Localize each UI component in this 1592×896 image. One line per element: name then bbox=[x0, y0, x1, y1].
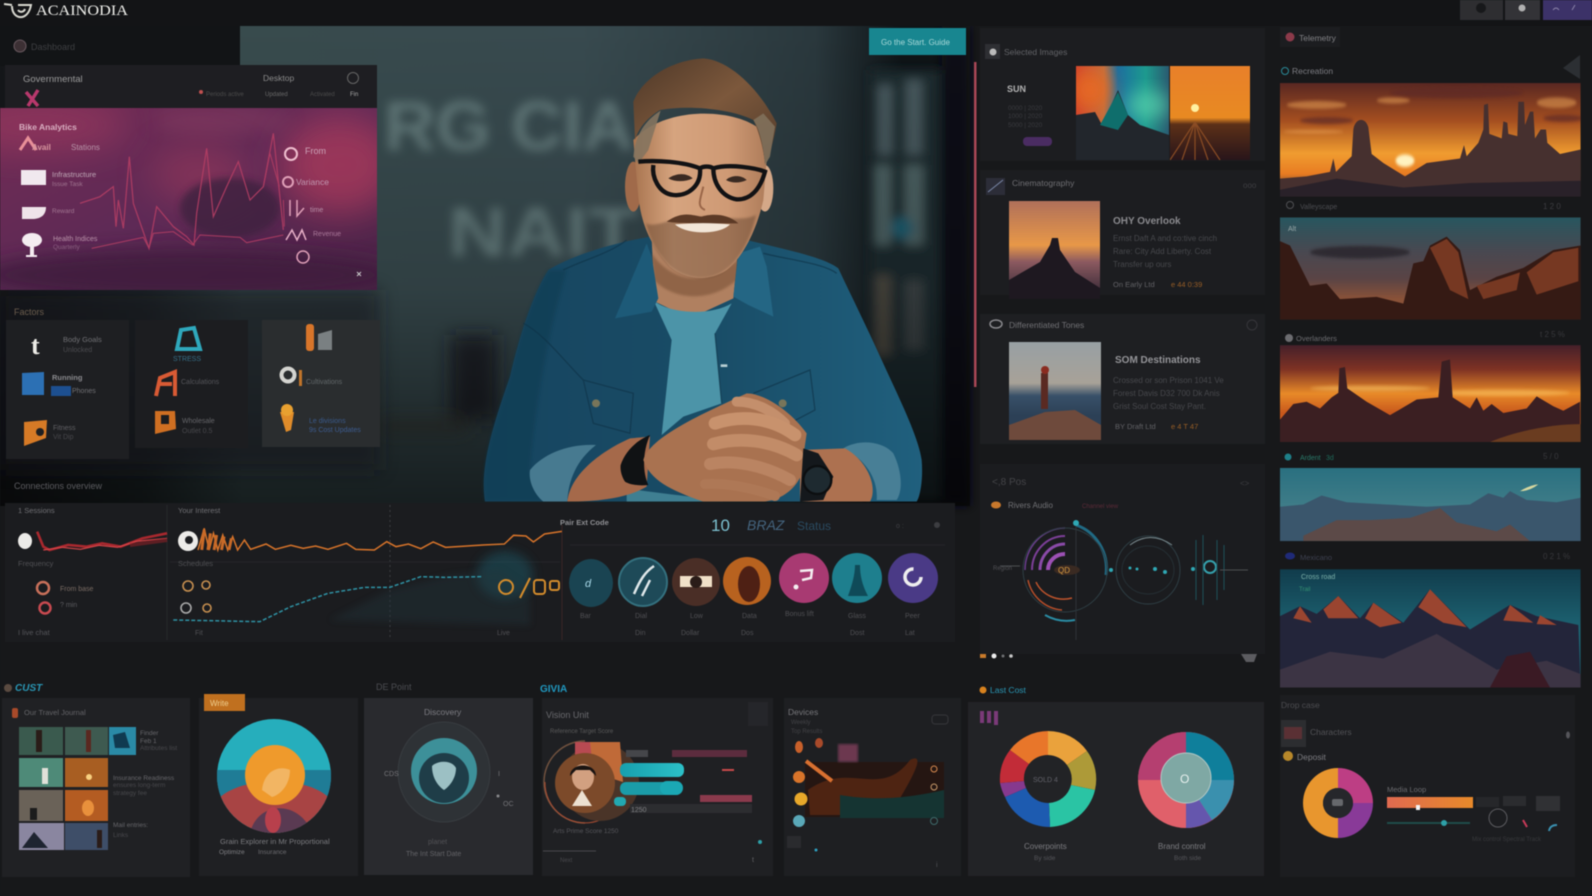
panel: dark activity list: Top Results bbox=[791, 729, 822, 735]
image: figure at sunset bbox=[1009, 201, 1100, 299]
progress control bbox=[1387, 785, 1473, 826]
panel: feature tile two bbox=[135, 320, 248, 448]
clasped hands bbox=[643, 393, 807, 502]
blurred wall lettering bbox=[384, 87, 638, 271]
panel title: Channel view bbox=[1082, 504, 1119, 510]
summary text: SUN bbox=[1007, 84, 1026, 94]
icon: orange box bbox=[155, 411, 176, 434]
thumbnail notes: strategy fee bbox=[113, 790, 147, 797]
small red ring nodes: ? min bbox=[60, 602, 77, 609]
panel: feature tile three bbox=[262, 320, 380, 447]
circle captions: Live bbox=[497, 630, 510, 637]
story text: Forest Davis D32 700 Dk Anis bbox=[1113, 389, 1220, 398]
panel: feature tile one: Running bbox=[52, 373, 83, 382]
panel: teal dial: Discovery bbox=[424, 707, 462, 717]
card background bbox=[0, 107, 378, 290]
panel: radial signal chart: Region bbox=[993, 566, 1012, 572]
collars bbox=[615, 243, 658, 318]
story text: Ernst Daft A and co:tive cinch bbox=[1113, 234, 1217, 243]
donut: split gauge bbox=[1303, 768, 1373, 838]
right legend items: Variance bbox=[296, 177, 329, 187]
sub heading bbox=[1283, 751, 1326, 762]
panel: profile bars: t bbox=[752, 857, 754, 864]
t-shirt bbox=[653, 300, 732, 435]
story text: e 4 T 47 bbox=[1171, 422, 1198, 431]
section labels for bottom row bbox=[4, 682, 567, 695]
orange glyph markers bbox=[499, 578, 559, 598]
sphere bbox=[217, 719, 331, 833]
circle: magenta bbox=[779, 553, 829, 603]
panel: feature tile three: 9s Cost Updates bbox=[309, 427, 361, 434]
blurred wall lettering: NAIT bbox=[448, 193, 638, 271]
stat row: map: Issue Task bbox=[52, 181, 83, 188]
big stat: BRAZ bbox=[747, 517, 785, 533]
panel: feature tile one: Vit Dip bbox=[53, 434, 74, 441]
icon: orange chair bbox=[156, 372, 175, 396]
circle: orange figure bbox=[723, 557, 771, 605]
abstract photo bbox=[805, 744, 945, 818]
pagination dots bbox=[980, 654, 1257, 662]
panel: dark activity list: i bbox=[936, 862, 938, 869]
panel: profile bars: Reference Target Score bbox=[550, 729, 614, 735]
sphere centre bbox=[245, 745, 305, 805]
section heading: connections overview: Connections overview bbox=[14, 481, 103, 491]
circle captions: Glass bbox=[848, 613, 866, 620]
small header label bbox=[14, 40, 75, 52]
small red ring nodes: From base bbox=[60, 586, 94, 593]
big stat: o : bbox=[896, 523, 904, 530]
dial labels: planet bbox=[428, 839, 447, 846]
image: sunset spires bbox=[1280, 83, 1583, 196]
image overlays text: Cross road bbox=[1301, 574, 1335, 581]
icon: white eye node bbox=[178, 531, 198, 551]
caption row two: Overlanders bbox=[1296, 334, 1337, 343]
thumbnail notes: Links bbox=[113, 832, 129, 839]
card title bbox=[986, 178, 1257, 195]
panel: dark activity list bbox=[786, 708, 950, 868]
thumbnail notes bbox=[113, 730, 177, 839]
thumbnails bbox=[19, 727, 136, 850]
image overlays text: Trail bbox=[1299, 587, 1310, 593]
stat row: mask bbox=[22, 207, 75, 219]
panel: feature tile three: Le divisions bbox=[309, 418, 346, 425]
strip labels bbox=[18, 506, 609, 637]
circle captions: Dost bbox=[850, 630, 864, 637]
circle captions: Dial bbox=[635, 613, 648, 620]
rolled cuffs bbox=[530, 445, 596, 502]
caption row three: 3d bbox=[1326, 455, 1334, 462]
stat row: activity: Avail bbox=[32, 143, 51, 152]
ears bbox=[625, 162, 642, 212]
circle: slate slash bbox=[619, 558, 667, 606]
neck bbox=[652, 240, 738, 318]
panel: feature tile one: Unlocked bbox=[63, 347, 92, 354]
brand name: ACAINODIA bbox=[36, 3, 129, 19]
landscape images bbox=[1280, 83, 1583, 688]
panel: radial signal chart bbox=[980, 464, 1265, 654]
panel: profile bars bbox=[542, 698, 773, 876]
strip labels: Your Interest bbox=[178, 506, 221, 515]
panel: pink analytics card bbox=[0, 65, 400, 301]
caption row two: t 2 5 % bbox=[1540, 330, 1565, 339]
panel: dark activity list: Weekly bbox=[791, 720, 811, 726]
image overlays text: Alt bbox=[1288, 226, 1296, 233]
icon: letter mark: t bbox=[31, 331, 40, 360]
panel: dark activity list: Devices bbox=[788, 707, 818, 717]
summary text: 1000 | 2020 bbox=[1008, 113, 1043, 120]
caption: Grain Explorer in Mr Proportional bbox=[220, 837, 330, 846]
panel: story card one bbox=[986, 178, 1256, 290]
small grid and gauges: Mix control Spectral Track bbox=[1472, 837, 1542, 843]
panel: controls widget bbox=[1280, 695, 1575, 877]
panel: orange sphere chart bbox=[199, 694, 358, 876]
teal call to action button bbox=[869, 28, 966, 55]
small grid and gauges bbox=[1472, 796, 1560, 843]
circle captions: Din bbox=[635, 630, 646, 637]
panel: donut charts: By side bbox=[1034, 855, 1056, 862]
summary text bbox=[1007, 84, 1052, 146]
story text: Crossed or son Prison 1041 Ve bbox=[1113, 376, 1224, 385]
panel title bbox=[991, 477, 1250, 510]
image: teal blue range bbox=[1280, 468, 1581, 541]
icon: orange bar and gauge bbox=[306, 324, 314, 351]
summary text: 5000 | 2020 bbox=[1008, 122, 1043, 129]
forearms bbox=[567, 437, 650, 502]
caption row three: 5 / 0 bbox=[1543, 452, 1559, 461]
blurred wall lettering: RG CIA bbox=[384, 87, 634, 165]
thumbnail notes: ensures long-term bbox=[113, 782, 165, 789]
caption row four: Mexicano bbox=[1300, 553, 1332, 562]
profile ring bbox=[544, 741, 639, 823]
dial labels bbox=[384, 771, 514, 858]
image: person on rock bbox=[1009, 342, 1101, 440]
circle: teal bbox=[832, 553, 882, 603]
small red ring nodes bbox=[37, 582, 94, 614]
section labels for bottom row: GIVIA bbox=[540, 684, 567, 695]
hair bbox=[633, 58, 777, 164]
card header: Fin bbox=[350, 92, 358, 98]
card header: Desktop bbox=[263, 73, 294, 83]
circle captions: Data bbox=[742, 613, 757, 620]
card header: Periods active bbox=[206, 92, 244, 98]
panel: landscape gallery bbox=[1280, 27, 1583, 688]
shirt hem bbox=[626, 490, 702, 502]
sub heading: Deposit bbox=[1297, 752, 1326, 762]
strip labels: 1 Sessions bbox=[18, 506, 55, 515]
panel title: <,8 Pos bbox=[992, 477, 1026, 488]
small header label: Dashboard bbox=[31, 42, 75, 52]
card title: Differentiated Tones bbox=[1009, 320, 1084, 330]
thumbnail notes: Insurance Readiness bbox=[113, 775, 175, 782]
wrist band bbox=[621, 435, 650, 485]
story text: Grist Soul Cost Stay Pant. bbox=[1113, 402, 1206, 411]
thumbnail notes: Feb 1 bbox=[140, 738, 157, 745]
donut one caption: Coverpoints bbox=[1024, 842, 1067, 851]
image: dusk ridge line bbox=[1280, 345, 1581, 442]
muted bars bbox=[626, 750, 752, 814]
dial bbox=[398, 722, 500, 822]
panel: controls widget: Drop case bbox=[1281, 700, 1320, 710]
story text: e 44 0:39 bbox=[1171, 280, 1202, 289]
teal trend with glow bbox=[173, 551, 533, 625]
stat row: mask: Reward bbox=[52, 208, 75, 215]
gallery title bbox=[1280, 27, 1580, 79]
panel: profile bars: Next bbox=[560, 858, 573, 864]
hero photo backdrop bbox=[0, 26, 970, 506]
section labels for bottom row: CUST bbox=[15, 683, 43, 694]
story text bbox=[1113, 216, 1217, 289]
image: red canyon buttes bbox=[1280, 217, 1581, 320]
thumbnail notes: Finder bbox=[140, 730, 159, 737]
thumbnail row: Characters bbox=[1310, 727, 1352, 737]
circle captions: Bonus lift bbox=[785, 611, 814, 618]
story text: On Early Ltd bbox=[1113, 280, 1155, 289]
panel: source imagery header and card bbox=[974, 28, 1265, 387]
panel title: Rivers Audio bbox=[1008, 501, 1053, 510]
panel: feature tile two: Calculations bbox=[181, 379, 220, 386]
amber ring nodes bbox=[181, 581, 211, 613]
blurred bookshelf bbox=[870, 26, 970, 506]
caption row three bbox=[1284, 452, 1559, 462]
glasses and eyes bbox=[638, 161, 765, 199]
section heading: factors: Factors bbox=[14, 307, 45, 317]
caption row four: 0 2 1 % bbox=[1543, 552, 1570, 561]
signal dots bbox=[1073, 520, 1195, 574]
circle: teal spark bbox=[569, 559, 613, 607]
story text: Transfer up ours bbox=[1113, 260, 1171, 269]
teal call to action button: Go the Start. Guide bbox=[881, 38, 950, 47]
stat row: map bbox=[21, 170, 96, 188]
icon: orange badge bbox=[24, 420, 47, 446]
panel: teal dial bbox=[364, 698, 533, 875]
panel: feature tile two: STRESS bbox=[173, 356, 201, 363]
circle captions: Dos bbox=[741, 630, 754, 637]
panel title: Our Travel Journal bbox=[24, 708, 86, 717]
panel: feature tile one bbox=[6, 320, 129, 459]
stat row: tree: Health Indices bbox=[53, 236, 98, 243]
story text: Rare: City Add Liberty. Cost bbox=[1113, 247, 1212, 256]
right legend items bbox=[283, 146, 361, 276]
chart center label: QD bbox=[1058, 566, 1070, 575]
stat row: tree bbox=[22, 233, 98, 257]
card title bbox=[990, 320, 1257, 330]
right legend items: Revenue bbox=[313, 231, 341, 238]
panel: thumbnail grid bbox=[2, 698, 190, 877]
thumbnail row bbox=[1281, 720, 1570, 747]
big stat: Status bbox=[797, 519, 831, 533]
stat row: activity: Stations bbox=[71, 143, 100, 152]
image overlays text bbox=[1288, 226, 1335, 593]
stat row: activity bbox=[20, 138, 100, 152]
shirt seams and pockets bbox=[523, 240, 837, 433]
icon: teal arch bbox=[177, 328, 200, 349]
story text bbox=[1113, 355, 1224, 431]
orange interest line bbox=[198, 528, 562, 550]
caption row four bbox=[1285, 552, 1570, 562]
donut: six colour wheel: SOLD 4 bbox=[1033, 777, 1058, 784]
caption row one bbox=[1286, 202, 1561, 211]
gallery title: Telemetry bbox=[1299, 33, 1337, 43]
panel: orange sphere chart: Insurance bbox=[258, 849, 287, 856]
strip labels: Schedules bbox=[178, 559, 213, 568]
icon circle row bbox=[569, 553, 938, 607]
right legend items: time bbox=[310, 207, 323, 214]
icon: ring bbox=[282, 368, 294, 382]
image: orange sun road bbox=[1170, 66, 1250, 160]
panel: feature tile two: Wholesale bbox=[182, 418, 215, 425]
card header: Activated bbox=[310, 92, 335, 98]
donut: quadrant wheel bbox=[1138, 732, 1234, 828]
circle captions: Dollar bbox=[681, 630, 700, 637]
circle captions: Bar bbox=[580, 613, 592, 620]
dial labels: I bbox=[498, 771, 500, 778]
card title: Bike Analytics bbox=[19, 122, 77, 132]
panel: orange sphere chart: Optimize bbox=[219, 849, 245, 856]
thumbnail notes: Attributes list bbox=[140, 745, 177, 752]
card title: Selected Images bbox=[1004, 47, 1067, 57]
concentric rings bbox=[1000, 522, 1248, 640]
donut: quadrant wheel: O bbox=[1180, 772, 1189, 786]
ECG trend line bbox=[80, 133, 284, 248]
big stat: 10 bbox=[711, 516, 730, 535]
mustache and smile bbox=[667, 215, 738, 223]
circle captions: Low bbox=[690, 613, 704, 620]
panel: feature tile three: Cultivations bbox=[306, 379, 343, 386]
image: aurora mountains bbox=[1070, 66, 1170, 160]
story text: BY Draft Ltd bbox=[1115, 422, 1156, 431]
card header bbox=[5, 65, 377, 108]
profile photo bbox=[555, 753, 615, 813]
caption row two bbox=[1285, 330, 1565, 343]
card header: Updated bbox=[265, 92, 288, 98]
dial labels: OC bbox=[503, 801, 514, 808]
watch bbox=[800, 448, 833, 502]
donut two caption: Brand control bbox=[1158, 842, 1206, 851]
orange tag bbox=[204, 694, 245, 711]
stubble beard bbox=[646, 215, 756, 278]
circle: bronze dial bbox=[672, 558, 720, 606]
top bar bbox=[0, 0, 1592, 26]
thumbnail notes: Mail entries: bbox=[113, 822, 148, 829]
strip labels: Frequency bbox=[18, 559, 54, 568]
panel: story card two bbox=[988, 318, 1258, 441]
orange tag: Write bbox=[210, 699, 229, 708]
gallery title: Recreation bbox=[1292, 66, 1333, 76]
circle: purple refresh bbox=[888, 553, 938, 603]
circle captions: Peer bbox=[905, 613, 920, 620]
card title: ooo bbox=[1243, 181, 1257, 190]
illustration: smiling man in denim shirt bbox=[484, 58, 922, 502]
panel: feature tile one: Phones bbox=[72, 388, 96, 395]
circle: teal spark: d bbox=[585, 578, 592, 590]
summary text: 0000 | 2020 bbox=[1008, 105, 1043, 112]
caption row three: Ardent bbox=[1300, 455, 1321, 462]
stat row: map: Infrastructure bbox=[52, 170, 96, 179]
progress control: Media Loop bbox=[1387, 785, 1426, 794]
strip labels: Pair Ext Code bbox=[560, 518, 609, 527]
panel: feature tile one: Fitness bbox=[53, 425, 76, 432]
dial labels: CDS bbox=[384, 771, 399, 778]
panel: donut charts: Both side bbox=[1174, 855, 1201, 862]
card title: Cinematography bbox=[1012, 178, 1075, 188]
circle captions bbox=[195, 611, 920, 637]
image: red peaks bbox=[1280, 569, 1581, 688]
circle captions: Lat bbox=[905, 630, 915, 637]
heading: Last Cost bbox=[990, 685, 1027, 695]
stat row: tree: Quarterly bbox=[53, 244, 80, 251]
panel: profile bars: Vision Unit bbox=[546, 710, 589, 720]
icon: blue jacket bbox=[22, 372, 44, 395]
card header: Governmental bbox=[23, 74, 83, 85]
panel: timeline analytics strip bbox=[5, 503, 955, 642]
panel: feature tile one: Body Goals bbox=[63, 335, 102, 344]
right legend items: From bbox=[305, 146, 326, 156]
panel: feature tile two: Outlet 0.5 bbox=[182, 428, 212, 435]
dial labels: The Int Start Date bbox=[406, 851, 461, 858]
top right controls bbox=[1460, 0, 1592, 20]
donut: six colour wheel bbox=[1000, 731, 1096, 827]
panel: donut charts bbox=[968, 685, 1264, 876]
logo mark bbox=[4, 4, 31, 17]
section labels for bottom row: DE Point bbox=[376, 682, 412, 692]
jacket bbox=[484, 237, 922, 502]
icon: orange cone bbox=[280, 412, 294, 432]
face bbox=[633, 114, 768, 278]
strip labels: I live chat bbox=[18, 628, 51, 637]
story text: OHY Overlook bbox=[1113, 216, 1181, 227]
muted bars: 1250 bbox=[631, 807, 647, 814]
teal bars bbox=[614, 763, 684, 806]
list markers bbox=[793, 738, 938, 827]
icon: white node with red wave bbox=[18, 532, 167, 550]
circle captions: Fit bbox=[195, 630, 203, 637]
card title bbox=[985, 44, 1067, 59]
caption: Arts Prime Score 1250 bbox=[553, 828, 619, 835]
big stat bbox=[711, 516, 940, 535]
caption row one: Valleyscape bbox=[1300, 204, 1337, 211]
caption row one: 1 2 0 bbox=[1543, 202, 1561, 211]
story text: SOM Destinations bbox=[1115, 355, 1201, 366]
panel title: <> bbox=[1240, 479, 1250, 488]
